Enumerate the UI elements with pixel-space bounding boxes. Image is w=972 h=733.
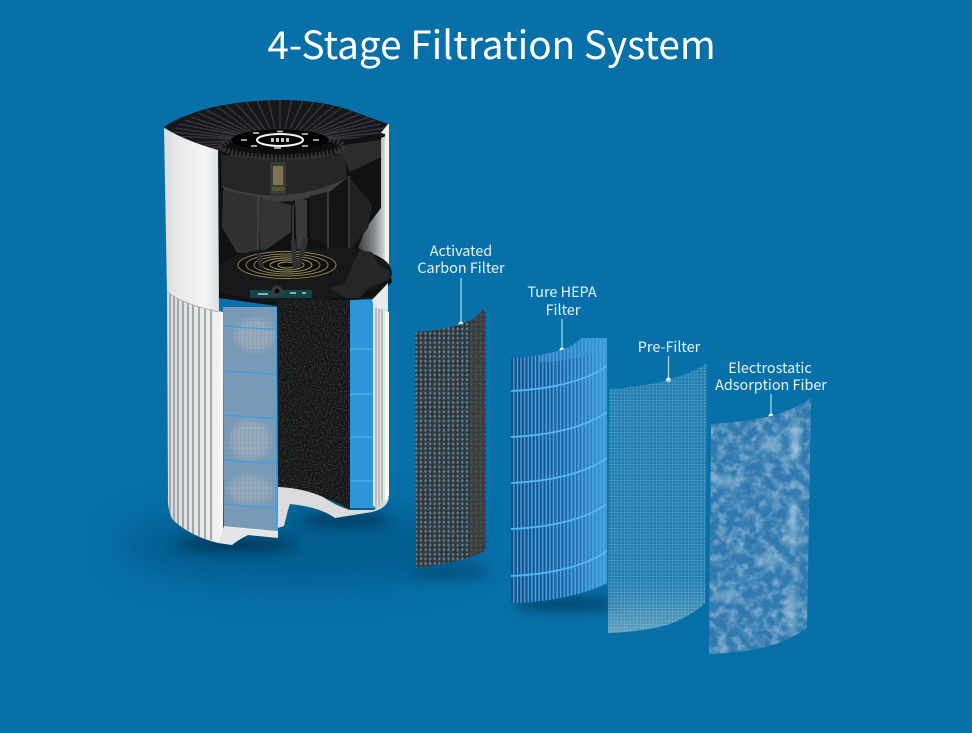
gold intake grille xyxy=(238,238,336,278)
label: HEPA: Filter xyxy=(546,299,581,320)
base tray left xyxy=(218,526,278,545)
right lower louvers xyxy=(373,305,389,508)
lower left louvers xyxy=(167,292,223,543)
activated carbon filter xyxy=(415,309,486,568)
label: electrostatic fiber xyxy=(715,357,827,418)
label: activated carbon xyxy=(417,240,505,326)
electrostatic adsorption fiber xyxy=(705,395,815,657)
true HEPA filter xyxy=(511,338,607,603)
right inner wall xyxy=(358,136,386,262)
lid with radial grille xyxy=(164,100,389,156)
fan blades xyxy=(222,176,372,260)
pre-filter mesh xyxy=(605,360,710,635)
label: pre-filter xyxy=(638,336,701,382)
label: HEPA: Ture HEPA xyxy=(527,281,597,302)
sensor window xyxy=(270,162,286,194)
label: HEPA xyxy=(527,281,597,352)
inner carbon layer xyxy=(275,298,353,513)
circuit board xyxy=(250,286,312,298)
base tray right xyxy=(278,487,389,528)
interior cavity xyxy=(218,125,392,306)
floor shadows xyxy=(120,505,617,612)
upper white shell xyxy=(164,128,219,312)
label: pre-filter: Pre-Filter xyxy=(638,336,701,357)
purifier cutaway xyxy=(160,100,392,550)
title: 4-Stage Filtration System xyxy=(267,15,716,71)
latch details xyxy=(330,250,390,298)
platform disc xyxy=(218,248,392,303)
label: activated carbon: Activated xyxy=(430,240,492,261)
right upper band xyxy=(372,283,388,311)
right outer shell strip xyxy=(381,123,389,266)
control panel xyxy=(231,130,329,150)
ribbed ring xyxy=(222,134,342,158)
right housing band xyxy=(327,140,381,172)
left shell seam xyxy=(167,292,219,312)
pre-filter and fibre panel xyxy=(223,307,278,531)
label: electrostatic fiber: Electrostatic xyxy=(728,357,812,378)
label: activated carbon: Carbon Filter xyxy=(417,257,505,278)
right HEPA edge xyxy=(350,300,374,508)
motor housing xyxy=(221,155,347,196)
flared collar xyxy=(222,178,347,202)
label: electrostatic fiber: Adsorption Fiber xyxy=(715,374,827,395)
